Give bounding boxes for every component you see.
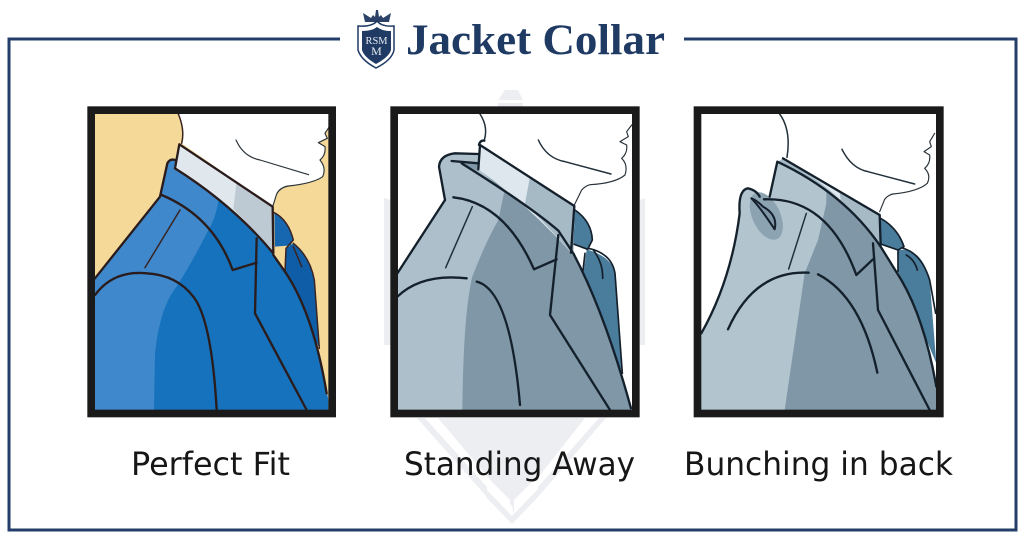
neck and face lines [780,114,915,184]
watermark shield [384,90,645,524]
jacket lines [397,153,631,410]
jacket lines [95,160,327,410]
panel: perfect fit [91,110,333,414]
icon: crest shield [358,10,394,68]
frame [91,110,332,413]
panel: bunching in back [697,110,940,414]
frame [394,110,636,413]
label: standing away: Standing Away [404,445,635,483]
panel: standing away [394,110,636,414]
label: perfect fit: Perfect Fit [131,445,290,483]
tie [274,213,293,247]
title text: Jacket Collar [406,17,665,64]
head and neck [178,114,329,207]
jacket [95,147,328,410]
neck and face lines [480,114,611,174]
jacket [701,162,936,410]
tie [881,218,904,250]
shirt collar [478,145,574,253]
jacket lines [701,158,936,410]
collar fold [743,187,790,245]
jacket [397,147,631,410]
icon: crest shield: M [371,44,382,58]
label: bunching in back: Bunching in back [684,445,953,483]
frame [697,110,940,413]
tie [573,210,592,249]
title with crest [358,10,665,68]
icon: crest shield: RSM [366,36,388,47]
shirt collar [175,144,273,253]
shirt collar [778,158,881,246]
